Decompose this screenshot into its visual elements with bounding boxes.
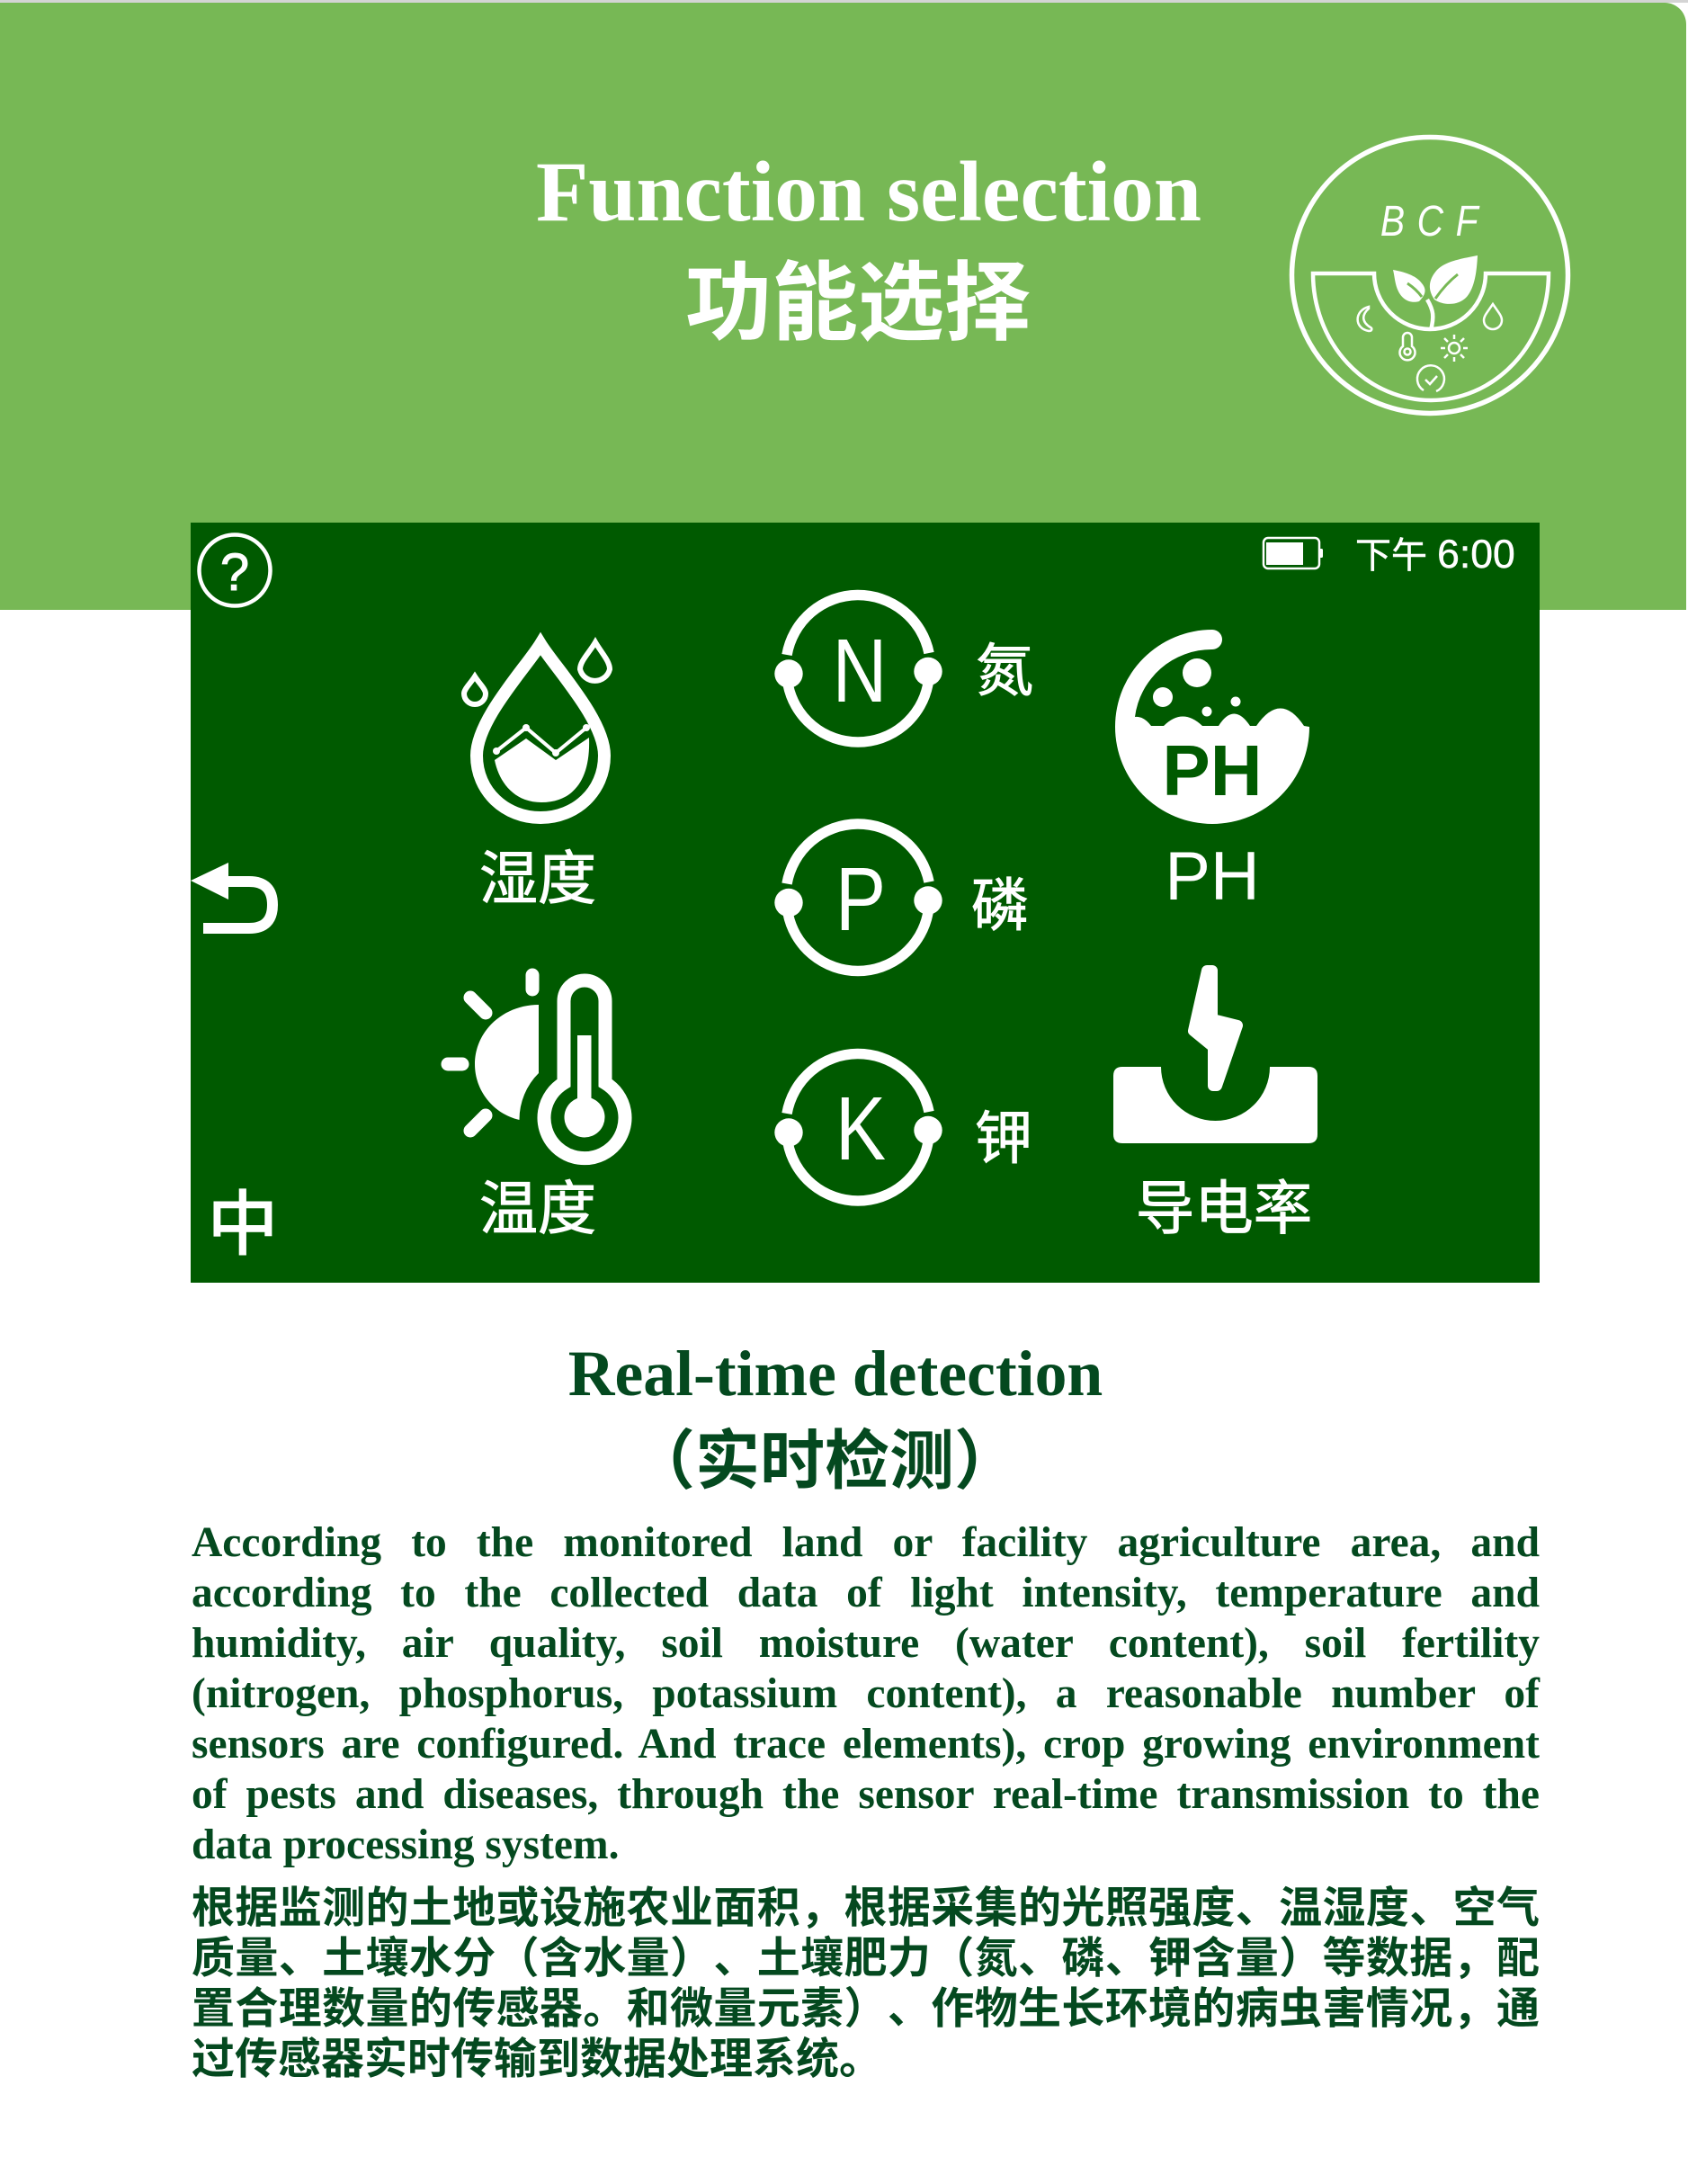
body text: Chinese: 过传感器实时传输到数据处理系统。	[192, 2036, 882, 2083]
body text: English: humidity, air quality, soil moisture (water content), soil fertility	[192, 1620, 1540, 1667]
title: Chinese: 功能选择	[685, 255, 1031, 352]
body text: English: (nitrogen, phosphorus, potassium content), a reasonable number of	[192, 1670, 1540, 1717]
icon: help	[200, 534, 270, 606]
icon: P ring	[774, 824, 942, 971]
heading: Chinese: （实时检测）	[630, 1426, 1019, 1498]
body text: English	[192, 1519, 1540, 1868]
icon: PH flask	[1115, 630, 1309, 824]
icon: humidity drop	[464, 642, 610, 818]
heading: Real-time detection: Real-time detection	[568, 1338, 1103, 1410]
title: Function selection: Function selection	[536, 144, 1201, 239]
icon: K ring: K	[835, 1078, 886, 1179]
icon: help: ?	[220, 543, 249, 602]
icon: PH flask: PH	[1162, 730, 1263, 810]
logo: leaves	[1393, 255, 1478, 330]
status bar: battery	[1264, 538, 1323, 568]
body text: Chinese: 根据监测的土地或设施农业面积，根据采集的光照强度、温湿度、空气	[192, 1884, 1540, 1932]
icon: conductivity	[1113, 971, 1317, 1143]
icon: sun and thermometer	[448, 975, 625, 1159]
status bar: time: 下午 6:00	[1355, 533, 1515, 577]
label: potassium: 钾	[975, 1106, 1032, 1171]
icon: N ring: N	[833, 620, 887, 721]
logo text: BCF	[1380, 198, 1490, 246]
body text: English: data processing system.	[192, 1821, 619, 1868]
icon: back arrow	[191, 863, 272, 928]
label: nitrogen: 氮	[976, 639, 1033, 703]
green header band	[0, 3, 1686, 610]
icon: P ring: P	[835, 848, 886, 950]
body text: English: according to the collected data of light intensity, temperature and	[192, 1570, 1540, 1616]
icon: N ring	[774, 595, 942, 742]
body text: Chinese: 置合理数量的传感器。和微量元素）、作物生长环境的病虫害情况，通	[192, 1985, 1540, 2033]
logo: BCF badge	[1291, 137, 1568, 414]
body text: Chinese: 质量、土壤水分（含水量）、土壤肥力（氮、磷、钾含量）等数据，配	[192, 1935, 1540, 1983]
body text: English: According to the monitored land or facility agriculture area, and	[192, 1519, 1540, 1566]
body text: Chinese	[192, 1884, 1540, 2083]
logo: small icons	[1358, 304, 1502, 391]
label: PH: PH	[1165, 838, 1260, 915]
label: temperature: 温度	[479, 1176, 596, 1241]
label: humidity: 湿度	[479, 846, 596, 911]
body text: English: of pests and diseases, through the sensor real-time transmission to the	[192, 1771, 1540, 1818]
body text: English: sensors are configured. And trace elements), crop growing environment	[192, 1721, 1540, 1768]
label: phosphorus: 磷	[971, 873, 1029, 938]
language toggle: 中	[208, 1185, 278, 1264]
label: conductivity: 导电率	[1136, 1176, 1312, 1241]
screen panel	[191, 523, 1540, 1283]
icon: K ring	[774, 1054, 942, 1201]
